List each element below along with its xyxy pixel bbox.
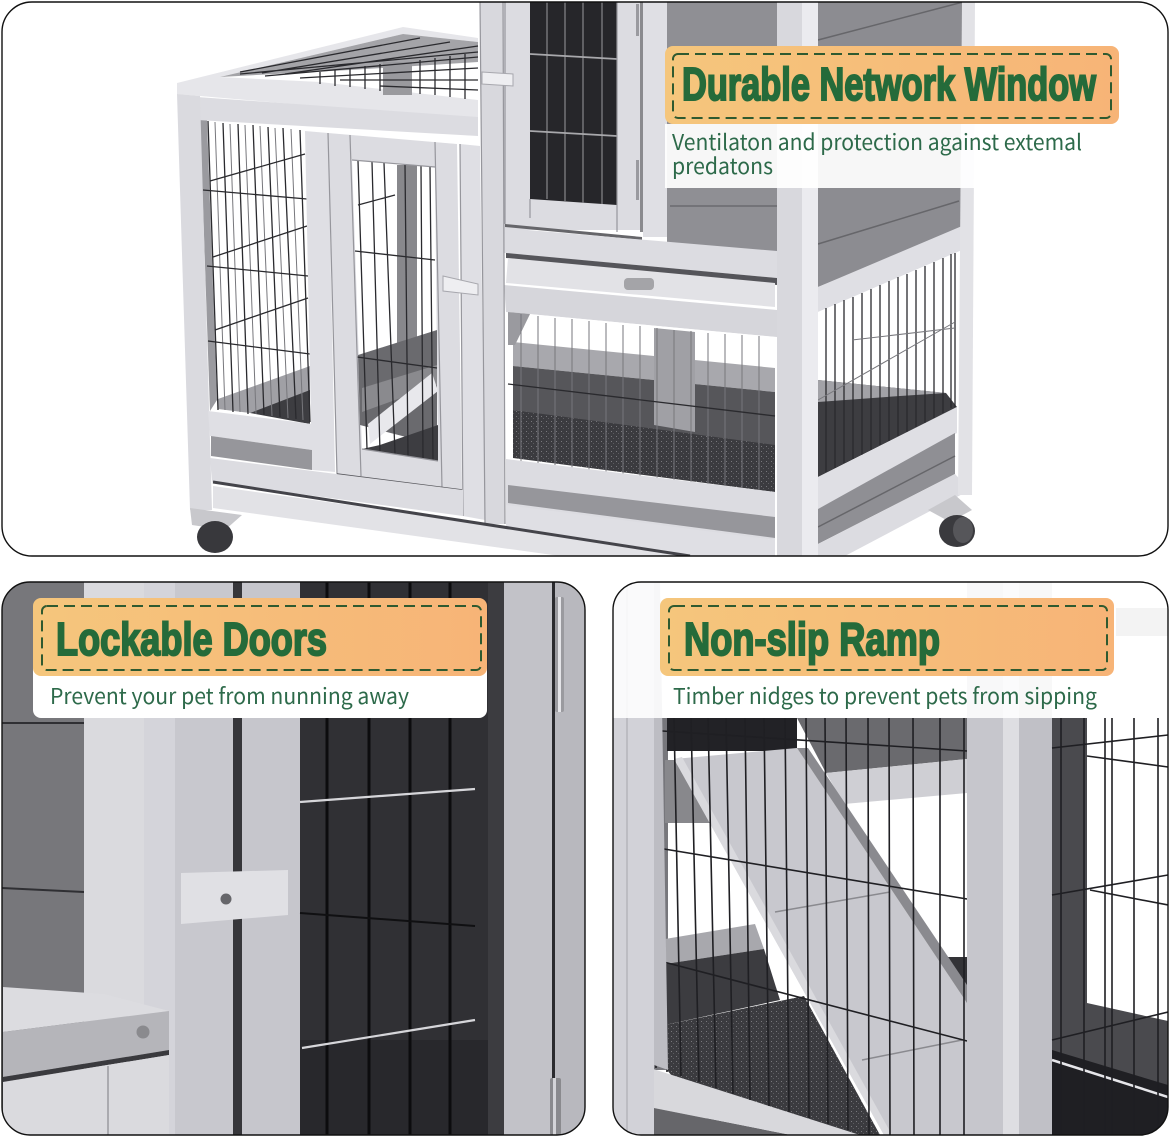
central post [460, 2, 505, 524]
left post [613, 582, 668, 1135]
left mesh window [200, 120, 312, 424]
callout: non-slip ramp [613, 582, 1168, 718]
centre post [967, 582, 1052, 1135]
dashed stitching [673, 54, 1111, 118]
lower front mesh window [508, 312, 775, 492]
lower hinge [550, 1078, 561, 1135]
dashed stitching [42, 606, 481, 670]
lower front rails [506, 459, 775, 556]
corner post [777, 2, 818, 556]
left caster [190, 508, 242, 553]
ramp [674, 748, 967, 1135]
heading: Lockable Doors [56, 613, 327, 665]
panel: non-slip ramp [613, 582, 1168, 1135]
upper hinge [555, 597, 564, 712]
orange heading banner [33, 598, 487, 676]
door latch [443, 276, 478, 295]
ramp door mesh [647, 718, 967, 1135]
panel: durable network window [177, 2, 1119, 556]
orange heading banner [660, 598, 1114, 676]
upper storey wall boards [667, 2, 963, 287]
translucent note background [613, 582, 1168, 718]
orange heading banner [665, 46, 1119, 124]
lower left box [3, 987, 169, 1135]
white note background [665, 124, 975, 188]
callout: lockable doors [33, 598, 487, 718]
description: Ventilaton and protection against extemal [672, 125, 1082, 157]
panel: lockable doors [2, 582, 585, 1135]
upper door [503, 2, 643, 240]
right door post [488, 582, 585, 1135]
right section with window and mesh [1052, 608, 1168, 1135]
door frame posts [84, 582, 300, 1135]
white note background [33, 668, 487, 718]
door latch [181, 870, 288, 924]
dashed stitching [669, 606, 1107, 670]
description second line: predatons [672, 149, 773, 181]
description: Prevent your pet from nunning away [50, 679, 410, 711]
roof mesh of the run [177, 27, 478, 120]
small run door [328, 133, 462, 490]
base rails [210, 458, 690, 556]
door mesh [300, 582, 488, 1135]
central front beam [504, 228, 777, 278]
run frame posts [177, 94, 478, 510]
right caster [928, 495, 975, 547]
sill [650, 1068, 860, 1135]
hutch illustration [177, 2, 975, 556]
callout: durable network window [665, 46, 1119, 188]
droppings tray with handle [506, 253, 777, 307]
description: Timber nidges to prevent pets from sipping [673, 679, 1098, 711]
interior walls behind the ramp [654, 718, 967, 1135]
side wall: rail, mesh and boards [818, 2, 975, 556]
heading: Non-slip Ramp [684, 613, 940, 665]
upper latch [482, 72, 513, 86]
